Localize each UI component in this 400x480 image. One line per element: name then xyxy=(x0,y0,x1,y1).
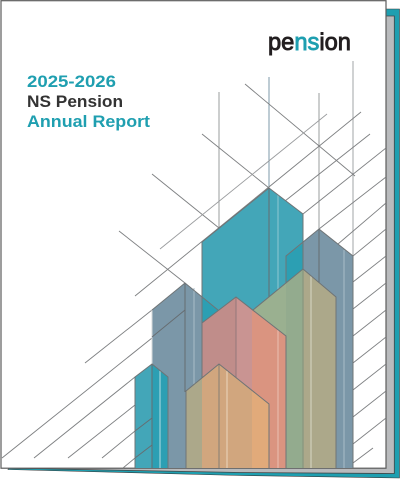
building: sage green tower xyxy=(253,269,336,468)
title: document name: Annual Report xyxy=(27,113,151,131)
building: left blue-grey tower xyxy=(152,283,218,468)
building: orange tower xyxy=(186,364,269,468)
title: report year: 2025-2026 xyxy=(27,73,116,91)
building: small teal tower xyxy=(135,364,168,468)
building: pink tower xyxy=(202,297,286,468)
building: tall teal tower xyxy=(202,188,303,468)
building: right blue-grey tower xyxy=(202,188,353,468)
logo: pension: pension xyxy=(268,29,351,56)
title: organisation name: NS Pension xyxy=(27,93,123,111)
